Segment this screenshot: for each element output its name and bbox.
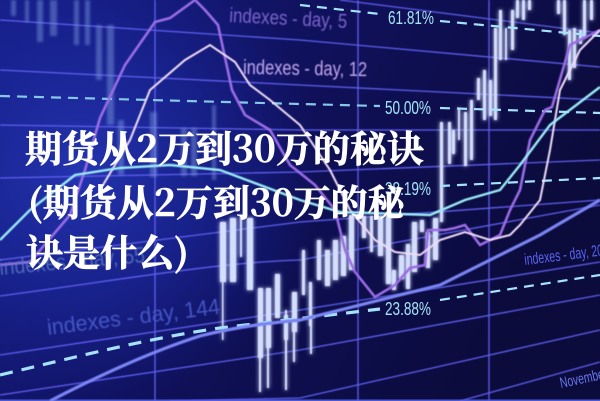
- label: indexes day 144: indexes - day, 144: [46, 294, 221, 340]
- label: indexes day 55: indexes - day, 55: [0, 242, 146, 280]
- label: 61.81%: 61.81%: [388, 8, 434, 28]
- title: line 2: (期货从2万到30万的秘: [28, 173, 405, 227]
- title: line 1: 期货从2万到30万的秘诀: [25, 119, 424, 173]
- label: indexes day 5: indexes - day, 5: [229, 5, 348, 33]
- label: 38.19%: 38.19%: [385, 179, 431, 199]
- curve: purple day 5: [0, 0, 600, 297]
- candlesticks: [220, 0, 593, 392]
- curve: thick blue day 144: [50, 200, 600, 401]
- curve: pale pink day 12: [100, 30, 600, 255]
- faint candlesticks upper left: [11, 0, 216, 180]
- label: indexes day 12: indexes - day, 12: [243, 57, 367, 81]
- label: 50.00%: 50.00%: [385, 98, 431, 118]
- curve: cyan day 55: [0, 87, 600, 240]
- title: line 3: 诀是什么): [26, 223, 189, 277]
- label: 23.88%: 23.88%: [385, 299, 431, 319]
